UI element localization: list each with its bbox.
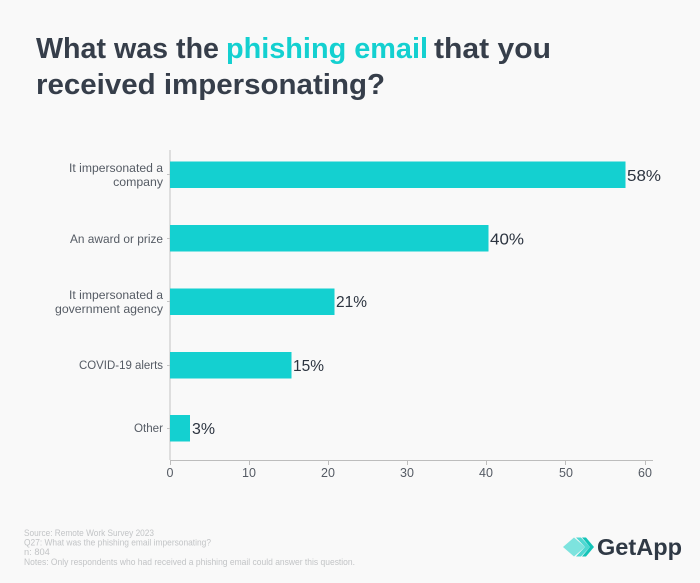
bar: It impersonated a company: company xyxy=(113,175,164,189)
title: What was the xyxy=(36,33,219,65)
bar: An award or prize: 40% xyxy=(490,232,524,248)
bar: It impersonated a government agency: government agency xyxy=(55,302,164,316)
x axis: 50 xyxy=(559,466,573,480)
bar chart xyxy=(55,150,661,480)
bar: It impersonated a government agency: It impersonated a xyxy=(69,288,163,302)
x axis: 30 xyxy=(400,466,414,480)
x axis xyxy=(167,460,653,480)
title: phishing email xyxy=(226,33,428,65)
bar: It impersonated a company: It impersonated a xyxy=(69,161,163,175)
x axis: 60 xyxy=(638,466,652,480)
title xyxy=(36,33,551,101)
bar: Other: 3% xyxy=(192,421,215,438)
x axis: 20 xyxy=(321,466,335,480)
bar: COVID-19 alerts: 15% xyxy=(293,358,324,375)
GetApp logo xyxy=(563,534,682,560)
bar: An award or prize xyxy=(70,225,524,252)
x axis: 40 xyxy=(479,466,493,480)
source notes: n: 804 xyxy=(24,547,50,557)
source notes: Notes: Only respondents who had received a phishing email could answer this question. xyxy=(24,557,355,567)
bar: It impersonated a company: 58% xyxy=(627,168,661,185)
x axis: 0 xyxy=(167,466,174,480)
source notes: Q27: What was the phishing email impersonating? xyxy=(24,538,211,548)
bar: It impersonated a company xyxy=(69,161,661,189)
icon: logo diamonds xyxy=(563,538,594,556)
bar: It impersonated a government agency: 21% xyxy=(336,294,367,311)
bar: Other xyxy=(134,415,215,442)
GetApp logo: GetApp xyxy=(597,534,682,560)
bar: It impersonated a government agency xyxy=(55,288,367,316)
x axis: 10 xyxy=(242,466,256,480)
y axis xyxy=(167,150,170,460)
source notes: Source: Remote Work Survey 2023 xyxy=(24,528,154,538)
bar: COVID-19 alerts: COVID-19 alerts xyxy=(79,358,163,372)
bar: Other: Other xyxy=(134,421,163,435)
bar: COVID-19 alerts xyxy=(79,352,324,378)
title: that you xyxy=(434,33,551,65)
title: received impersonating? xyxy=(36,69,385,101)
bar: An award or prize: An award or prize xyxy=(70,232,163,246)
source notes xyxy=(24,528,355,567)
